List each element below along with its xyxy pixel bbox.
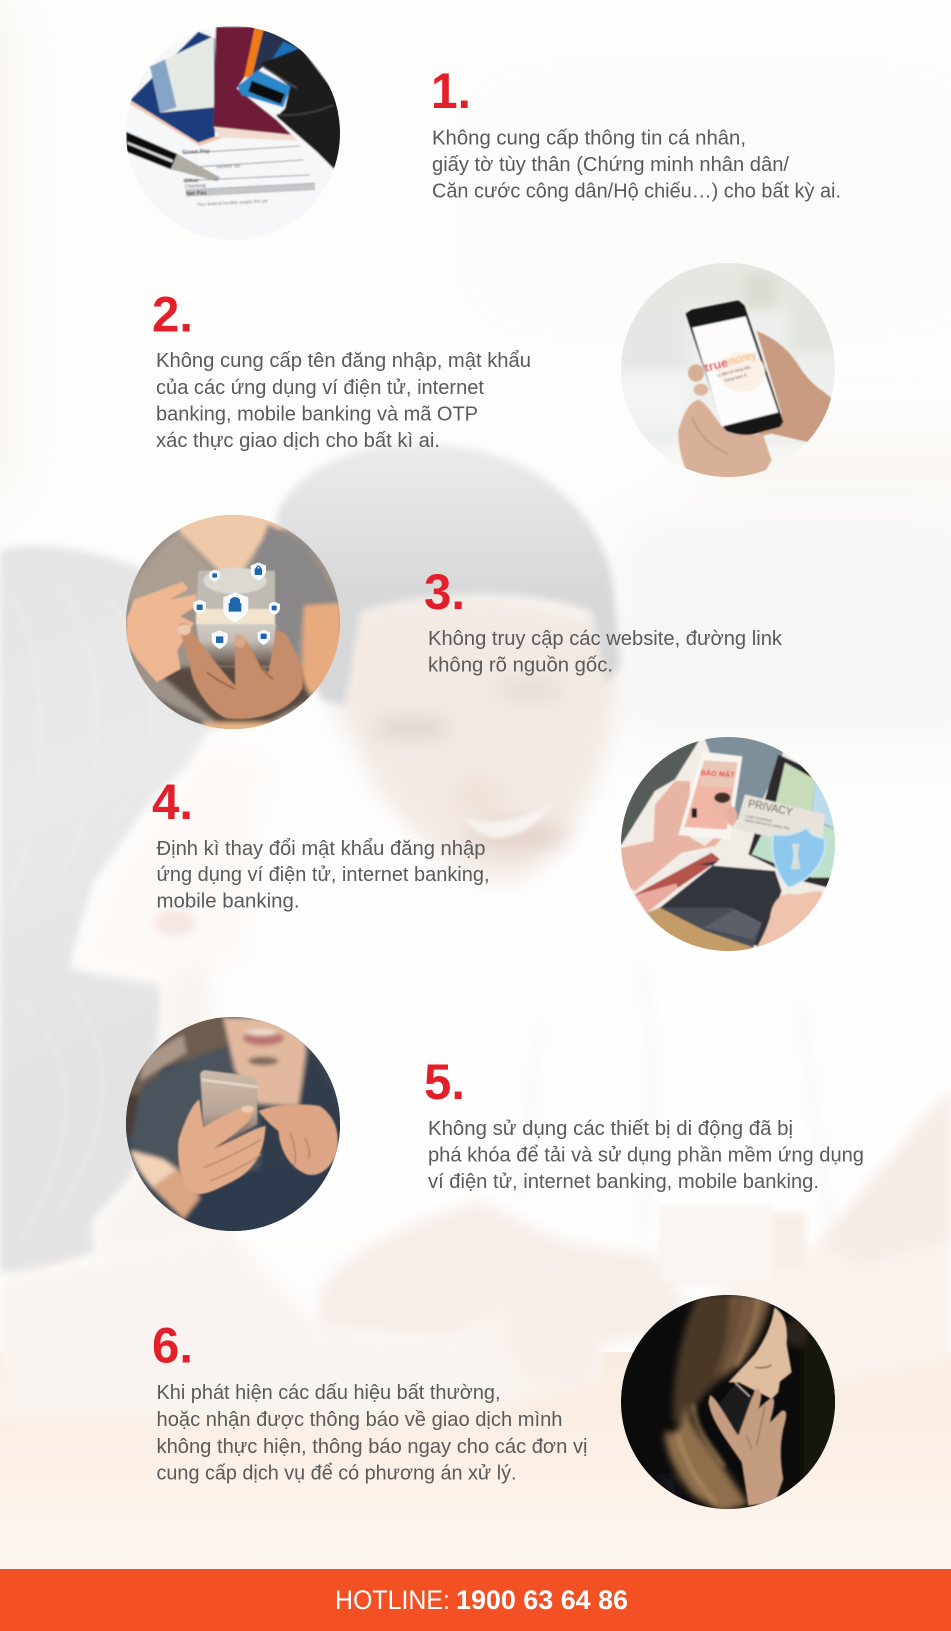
- photo: phone, laptop and privacy shield: Using internet on safety Site: [744, 818, 790, 831]
- step 3: [120, 509, 783, 736]
- photo: phone, laptop and privacy shield: PRIVACY: [747, 798, 794, 819]
- text block 4: [156, 838, 490, 912]
- lock icons: [193, 562, 280, 649]
- woman's hair strands: [10, 585, 152, 1240]
- text block 1: Không cung cấp thông tin cá nhân,: [432, 128, 746, 150]
- text block 1: Căn cước công dân/Hộ chiếu…) cho bất kỳ ai.: [432, 180, 841, 202]
- text block 4: mobile banking.: [156, 890, 300, 912]
- woman's face and lips: [75, 740, 270, 985]
- photo: ID documents, passport and wallet: [126, 26, 340, 208]
- hotline text: 1900 63 64 86: [456, 1585, 628, 1615]
- text block 6: [156, 1382, 588, 1484]
- photo: ID documents, passport and wallet: Net Pay: [186, 190, 208, 197]
- text block 3: [428, 628, 783, 676]
- text block 1: [432, 128, 841, 202]
- number 1: 1.: [431, 63, 471, 119]
- text block 5: [428, 1118, 864, 1193]
- photo: hands holding phone with truemoney app: true: [703, 355, 730, 375]
- text block 2: Không cung cấp tên đăng nhập, mật khẩu: [156, 350, 531, 372]
- photo: hands holding phone with truemoney app: [621, 263, 835, 477]
- text block 5: ví điện tử, internet banking, mobile banking.: [428, 1171, 819, 1193]
- text block 1: giấy tờ tùy thân (Chứng minh nhân dân/: [432, 154, 789, 176]
- arms and hands: [0, 1090, 951, 1418]
- text block 5: phá khóa để tải và sử dụng phần mềm ứng dụng: [428, 1144, 864, 1166]
- photo: hand holding phone with lock icons: [126, 515, 340, 729]
- text block 2: banking, mobile banking và mã OTP: [156, 404, 478, 426]
- text block 5: Không sử dụng các thiết bị di động đã bị: [428, 1118, 793, 1140]
- photo: ID documents, passport and wallet: Income Tax: [216, 163, 241, 169]
- phone in background: [661, 1207, 773, 1283]
- photo: ID documents, passport and wallet: Gross Pay: [182, 148, 211, 156]
- text block 3: Không truy cập các website, đường link: [428, 628, 783, 650]
- photo: hands holding phone with truemoney app: money: [727, 349, 758, 368]
- photo: ID documents, passport and wallet: Other: [184, 178, 200, 185]
- photo: phone, laptop and privacy shield: Login Protection: [745, 814, 772, 823]
- photo: phone, laptop and privacy shield: [621, 737, 835, 951]
- step 1: [126, 26, 840, 208]
- number 3: 3.: [424, 564, 465, 620]
- text block 2: [156, 350, 531, 452]
- text block 2: xác thực giao dịch cho bất kì ai.: [156, 430, 440, 452]
- text block 4: Định kì thay đổi mật khẩu đăng nhập: [156, 838, 486, 860]
- step 2: [152, 257, 842, 484]
- text block 6: hoặc nhận được thông báo về giao dịch mình: [156, 1409, 562, 1431]
- man's hair: [277, 443, 620, 705]
- photo: ID documents, passport and wallet: Checking: [185, 183, 206, 190]
- number 5: 5.: [424, 1054, 465, 1110]
- shirt: [230, 800, 951, 1240]
- photo: woman on a phone call: [621, 1295, 835, 1509]
- photo: phone, laptop and privacy shield: BẢO MẬT: [700, 768, 735, 779]
- text block 6: không thực hiện, thông báo ngay cho các đơn vị: [156, 1436, 588, 1458]
- hotline text: HOTLINE:: [335, 1585, 450, 1615]
- neck and arm of woman: [95, 960, 228, 1255]
- text block 4: ứng dụng ví điện tử, internet banking,: [156, 864, 490, 886]
- text block 6: cung cấp dịch vụ để có phương án xử lý.: [156, 1462, 516, 1484]
- number 6: 6.: [152, 1318, 193, 1374]
- number 4: 4.: [152, 774, 193, 830]
- man's face: [335, 593, 618, 883]
- step 6: [152, 1289, 842, 1515]
- woman's hair: [0, 546, 275, 1274]
- photo: hands holding phone with truemoney app: Đông Nam Á: [724, 372, 748, 383]
- step 5: [120, 1011, 864, 1238]
- man's smile: [465, 802, 552, 838]
- text block 2: của các ứng dụng ví điện tử, internet: [156, 377, 484, 399]
- text block 3: không rõ nguồn gốc.: [428, 654, 613, 676]
- table: [0, 1352, 951, 1574]
- number 2: 2.: [152, 286, 193, 342]
- photo: ID documents, passport and wallet: Your federal taxable wages this pe: [196, 198, 268, 207]
- photo: man tapping a phone: [126, 1017, 340, 1231]
- hotline banner: [0, 1569, 951, 1631]
- photo: hands holding phone with truemoney app: ví điện tử hàng đầu: [717, 364, 751, 378]
- text block 6: Khi phát hiện các dấu hiệu bất thường,: [156, 1382, 500, 1404]
- step 4: [152, 731, 842, 958]
